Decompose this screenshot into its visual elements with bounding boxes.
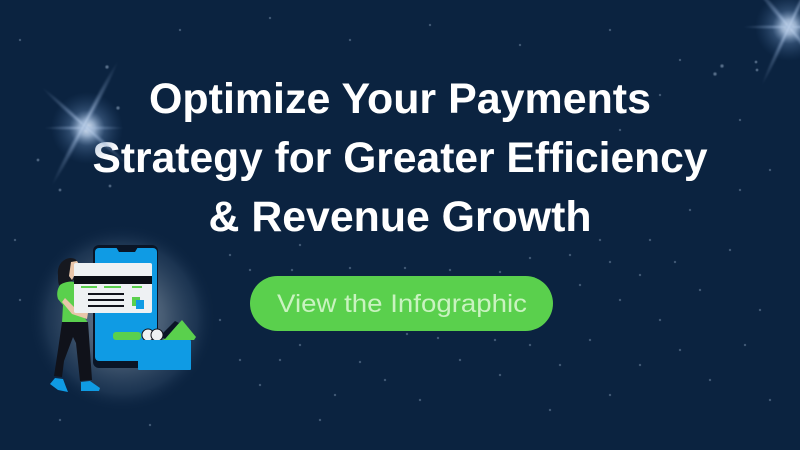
button: View the Infographic: View the Infographic (277, 290, 527, 318)
phone (93, 245, 158, 368)
title: Strategy for Greater Efficiency (92, 134, 708, 182)
cash (163, 320, 196, 340)
button: View the Infographic (250, 276, 553, 331)
green cart bar (113, 332, 141, 340)
title: & Revenue Growth (208, 193, 592, 241)
credit card (74, 263, 152, 313)
top-right sparkle star (743, 0, 800, 86)
illustration: person with phone, card and wallet (28, 224, 216, 412)
wallet (138, 340, 191, 370)
left sparkle star (40, 60, 131, 187)
title (92, 75, 708, 241)
title: Optimize Your Payments (149, 75, 651, 123)
person (50, 258, 100, 392)
glow behind illustration (28, 224, 216, 412)
coins (142, 329, 163, 341)
